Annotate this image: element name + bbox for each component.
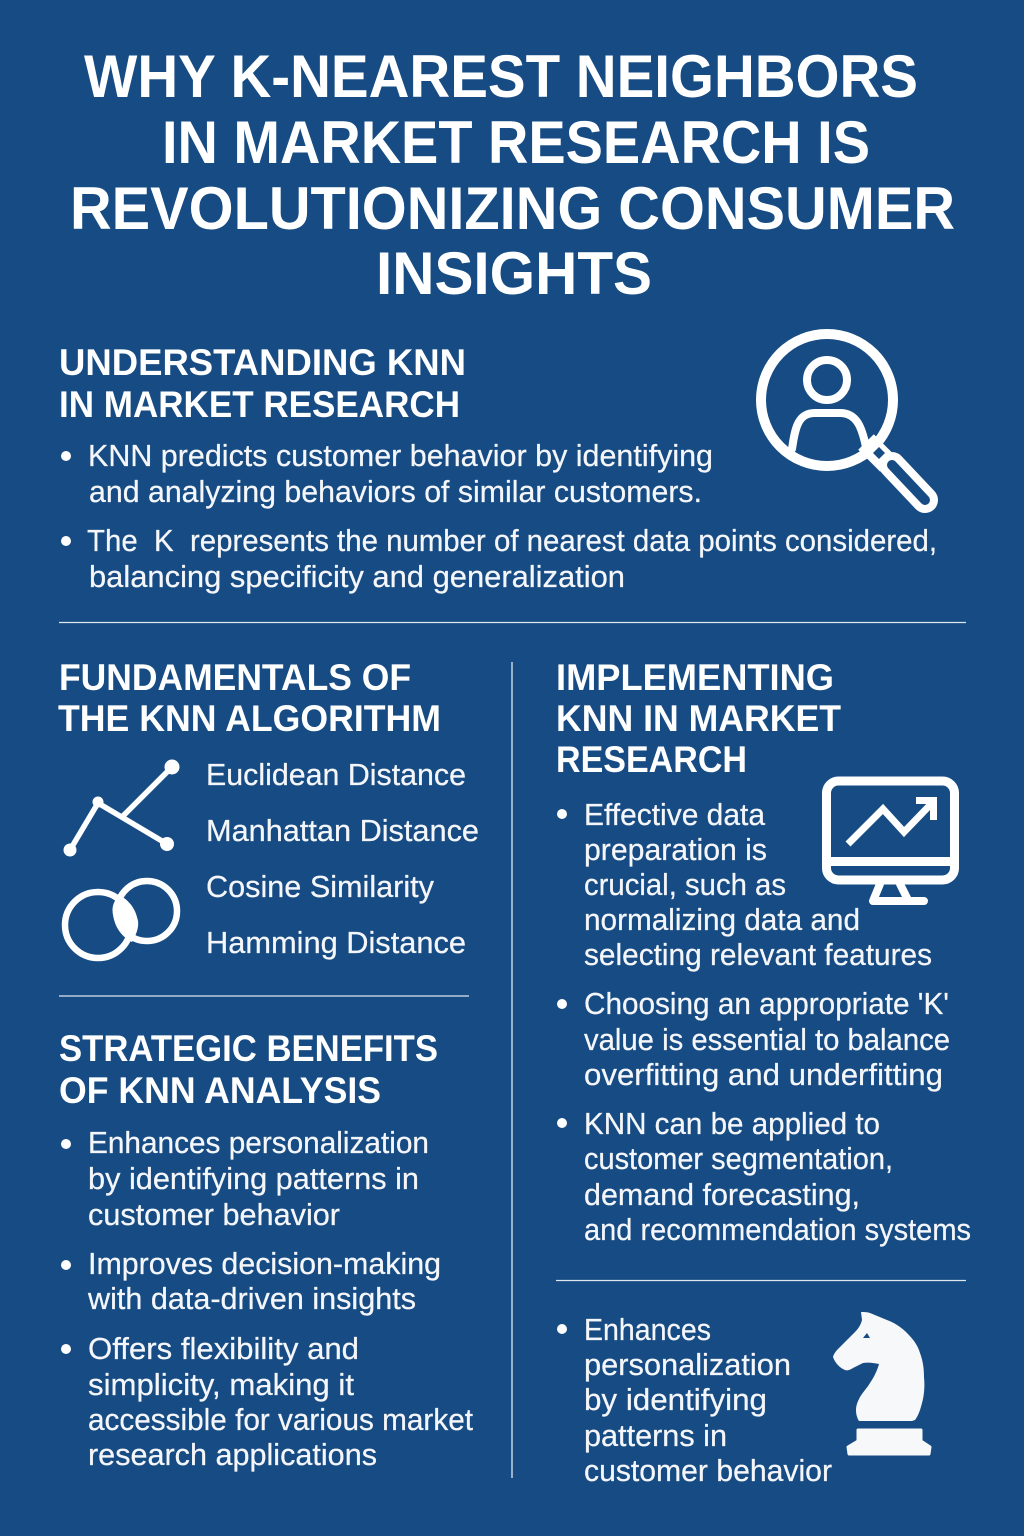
bullet: personalization [61, 1125, 429, 1232]
bullet: enhances personalization: by identifying [584, 1382, 767, 1417]
bullet: enhances personalization: personalization [584, 1347, 791, 1382]
bullet: the K: balancing specificity and generalization [89, 559, 625, 594]
heading: understanding KNN: IN MARKET RESEARCH [59, 384, 460, 425]
panel: implementing KNN [556, 657, 971, 1247]
bullet: data preparation [557, 797, 932, 972]
panel: chess strategy note [557, 1312, 930, 1488]
bullet: flexibility: accessible for various market [88, 1402, 473, 1437]
list: distance metrics: Manhattan Distance [206, 813, 479, 848]
bullet: personalization: by identifying patterns in [88, 1161, 419, 1196]
bullet: KNN predicts: and analyzing behaviors of similar customers. [89, 474, 702, 509]
bullet: choosing K: overfitting and underfitting [584, 1057, 943, 1092]
list: distance metrics: Hamming Distance [206, 925, 466, 960]
bullet: flexibility: Offers flexibility and [88, 1331, 359, 1366]
heading: understanding KNN [59, 342, 466, 425]
bullet: choosing K: Choosing an appropriate 'K' [584, 986, 949, 1021]
bullet: data preparation: normalizing data and [584, 902, 860, 937]
icon: overlapping circles [65, 881, 177, 958]
bullet: enhances personalization: patterns in [584, 1418, 727, 1453]
heading: understanding KNN: UNDERSTANDING KNN [59, 342, 466, 383]
icon: magnifying glass with person [761, 334, 925, 500]
list: distance metrics: Euclidean Distance [206, 757, 466, 792]
heading: strategic benefits [59, 1028, 438, 1111]
heading: implementing KNN: IMPLEMENTING [556, 657, 834, 698]
bullet: decision-making [61, 1246, 441, 1316]
bullet: decision-making: with data-driven insights [87, 1281, 416, 1316]
bullet: applications: customer segmentation, [584, 1141, 893, 1176]
panel: fundamentals of the KNN algorithm [58, 657, 479, 960]
bullet: enhances personalization: customer behavior [584, 1453, 832, 1488]
heading: implementing KNN: KNN IN MARKET [556, 698, 841, 739]
bullet: the K: The K represents the number of nearest data points considered, [87, 523, 937, 558]
heading: strategic benefits: OF KNN ANALYSIS [59, 1070, 381, 1111]
bullet: enhances personalization [557, 1312, 832, 1488]
bullet: data preparation: crucial, such as [584, 867, 786, 902]
bullet: flexibility: simplicity, making it [88, 1367, 354, 1402]
bullet: KNN predicts: KNN predicts customer behavior by identifying [88, 438, 713, 473]
bullet: personalization: customer behavior [88, 1197, 340, 1232]
heading: fundamentals [58, 657, 441, 739]
title: WHY K-NEAREST NEIGHBORS [84, 43, 918, 110]
heading: strategic benefits: STRATEGIC BENEFITS [59, 1028, 438, 1069]
bullet: applications [557, 1106, 971, 1247]
bullet: data preparation: preparation is [584, 832, 767, 867]
bullet: KNN predicts [61, 438, 713, 509]
panel: understanding KNN [59, 334, 937, 594]
bullet: data preparation: selecting relevant features [584, 937, 932, 972]
icon: monitor with rising chart [826, 781, 955, 901]
list: distance metrics [206, 757, 479, 960]
heading: fundamentals: THE KNN ALGORITHM [58, 698, 441, 739]
heading: implementing KNN [556, 657, 841, 780]
bullet: applications: demand forecasting, [584, 1177, 860, 1212]
title: REVOLUTIONIZING CONSUMER [70, 175, 955, 242]
icon: network distance lines [64, 760, 180, 856]
bullet: personalization: Enhances personalization [88, 1125, 429, 1160]
bullet: applications: and recommendation systems [584, 1212, 971, 1247]
heading: fundamentals: FUNDAMENTALS OF [59, 657, 411, 698]
title [70, 43, 955, 307]
title: INSIGHTS [376, 240, 652, 307]
bullet: flexibility: research applications [88, 1437, 377, 1472]
bullet: the K [61, 523, 937, 594]
bullet: decision-making: Improves decision-making [88, 1246, 441, 1281]
bullet: data preparation: Effective data [584, 797, 766, 832]
bullet: choosing K: value is essential to balance [584, 1022, 950, 1057]
list: distance metrics: Cosine Similarity [206, 869, 434, 904]
bullet: choosing K [557, 986, 950, 1092]
heading: implementing KNN: RESEARCH [556, 739, 747, 780]
panel: strategic benefits [59, 1028, 473, 1472]
bullet: flexibility [61, 1331, 473, 1472]
title: IN MARKET RESEARCH IS [162, 109, 870, 176]
bullet: applications: KNN can be applied to [584, 1106, 880, 1141]
bullet: enhances personalization: Enhances [584, 1312, 711, 1347]
icon: chess knight [833, 1312, 930, 1454]
